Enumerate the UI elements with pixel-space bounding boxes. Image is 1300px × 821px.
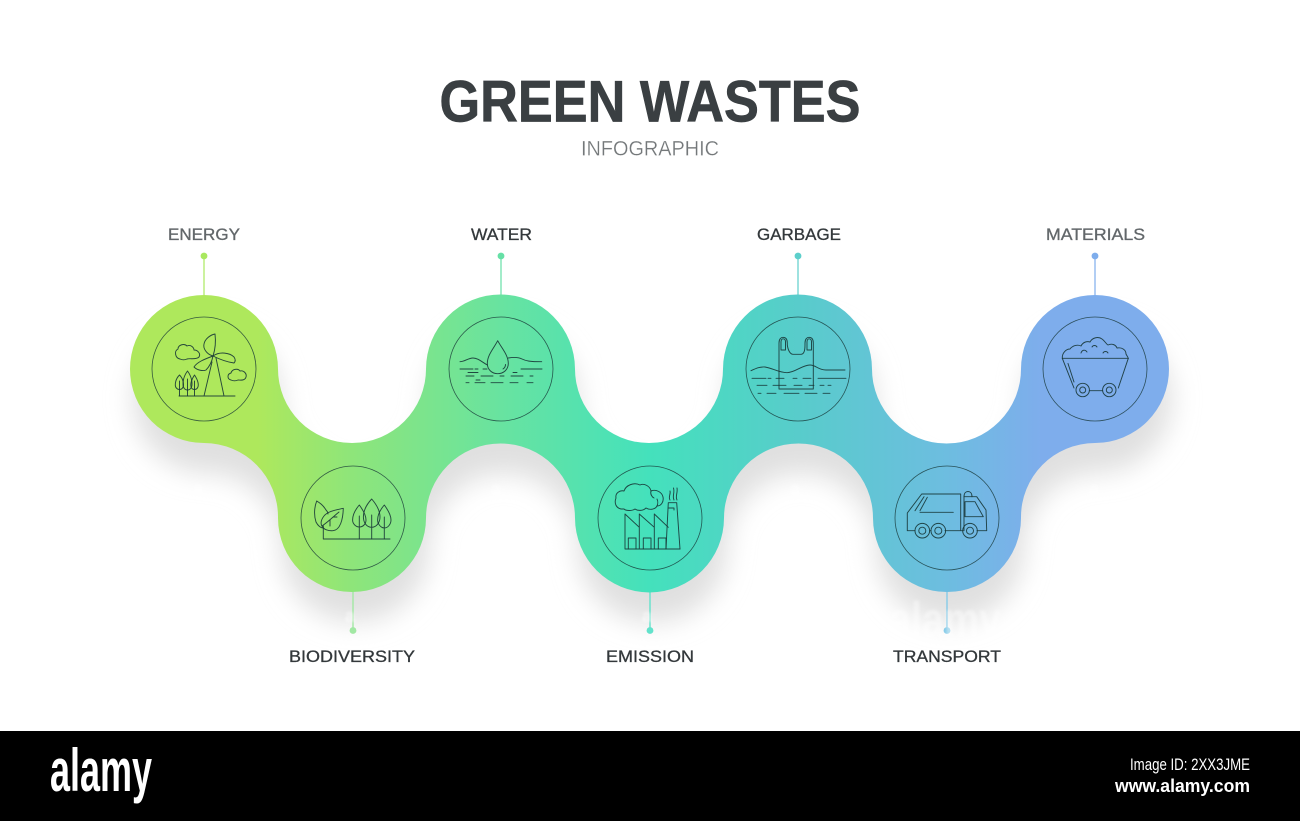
watermark traces in shadow: a	[790, 479, 801, 499]
connector: emission	[647, 590, 653, 634]
icon: wind turbine (energy)	[152, 317, 256, 421]
icon: loaded mine cart (materials)	[1043, 317, 1147, 421]
ribbon drop shadow	[133, 324, 1172, 622]
footer logo: alamy	[50, 737, 152, 804]
icon: water drop (water)	[449, 317, 553, 421]
footer url: www.alamy.com	[1114, 776, 1250, 796]
connector: water	[498, 253, 504, 296]
connector: energy	[201, 253, 207, 296]
label: energy: ENERGY	[168, 226, 240, 244]
icon: leaves and trees (biodiversity)	[301, 466, 405, 570]
watermark traces in shadow: alamy	[889, 592, 1001, 648]
watermark traces in shadow: a	[193, 479, 204, 499]
label: emission: EMISSION	[606, 648, 694, 666]
gradient serpentine ribbon	[130, 294, 1169, 592]
footer bar	[0, 731, 1300, 821]
connector: transport	[944, 590, 950, 634]
watermark traces in shadow	[193, 479, 1100, 648]
label: materials: MATERIALS	[1046, 226, 1145, 244]
icon: plastic bag in water (garbage)	[746, 317, 850, 421]
label: water: WATER	[471, 226, 532, 244]
watermark traces in shadow: a	[491, 479, 502, 499]
connector: garbage	[795, 253, 801, 296]
connector lines and dots	[201, 253, 1098, 634]
label: garbage: GARBAGE	[757, 226, 841, 244]
title: GREEN WASTES	[440, 70, 860, 134]
connector: materials	[1092, 253, 1098, 296]
watermark traces in shadow: a	[345, 606, 356, 626]
watermark traces in shadow: a	[642, 606, 653, 626]
label: biodiversity: BIODIVERSITY	[289, 648, 415, 666]
icon: garbage truck (transport)	[895, 466, 999, 570]
icon: factory with cloud (emission)	[598, 466, 702, 570]
watermark traces in shadow: a	[1089, 479, 1100, 499]
connector: biodiversity	[350, 590, 356, 634]
label: transport: TRANSPORT	[893, 648, 1001, 666]
footer image id: Image ID: 2XX3JME	[1130, 755, 1250, 774]
subtitle: INFOGRAPHIC	[581, 138, 719, 160]
